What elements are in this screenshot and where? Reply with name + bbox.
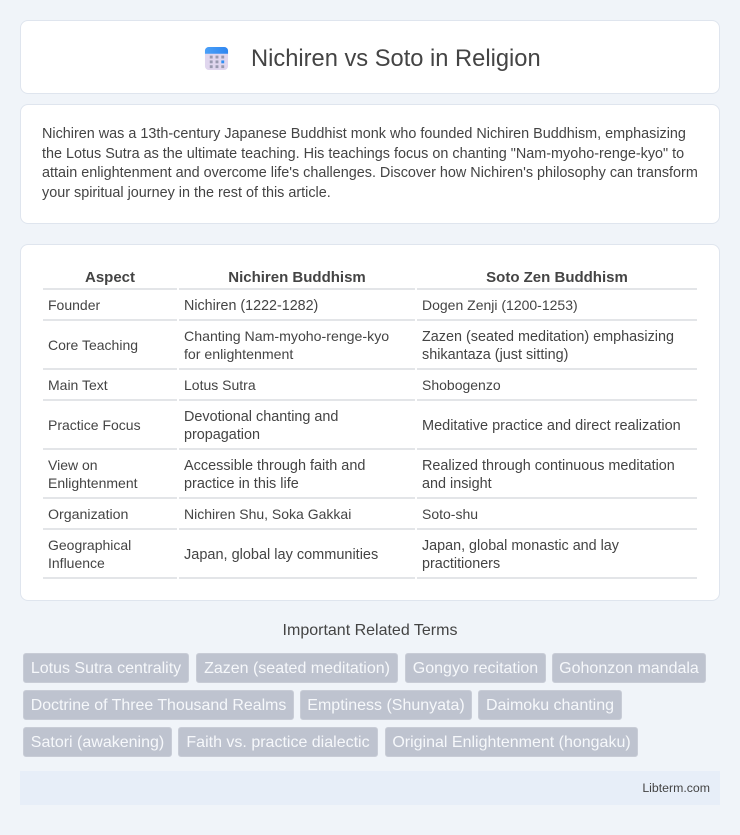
related terms tags: Zazen (seated meditation) — [204, 660, 390, 677]
comparison table: Devotional chanting and — [184, 409, 338, 425]
related terms tags: Emptiness (Shunyata) — [307, 697, 465, 714]
comparison table: propagation — [184, 427, 260, 443]
related terms tags: Faith vs. practice dialectic — [186, 734, 370, 751]
comparison table: Realized through continuous meditation — [422, 458, 675, 474]
intro text — [42, 126, 698, 201]
comparison table: Main Text — [48, 377, 108, 393]
header card — [20, 20, 720, 94]
icon: calendar — [204, 47, 228, 70]
comparison table: Geographical — [48, 537, 131, 553]
comparison table: Shobogenzo — [422, 377, 501, 393]
related terms tags: Doctrine of Three Thousand Realms — [31, 697, 286, 714]
comparison table: Japan, global monastic and lay — [422, 538, 619, 554]
intro text: the Lotus Sutra as the ultimate teaching. His teachings focus on chanting "Nam-myoho-renge-kyo" to — [42, 146, 684, 162]
intro text: attain enlightenment and overcome life's challenges. Discover how Nichiren's philosophy can transform — [42, 165, 698, 181]
comparison table: Organization — [48, 507, 128, 523]
comparison table: Nichiren (1222-1282) — [184, 298, 318, 314]
comparison table: Chanting Nam-myoho-renge-kyo — [184, 328, 389, 344]
table panel — [20, 244, 720, 601]
comparison table: Aspect — [85, 269, 135, 286]
comparison table: Soto Zen Buddhism — [486, 269, 628, 286]
comparison table: practice in this life — [184, 476, 299, 492]
comparison table: Dogen Zenji (1200-1253) — [422, 297, 578, 313]
related terms tags — [23, 653, 706, 757]
comparison table: Nichiren Shu, Soka Gakkai — [184, 506, 351, 522]
footer bar — [20, 771, 720, 805]
comparison table: Enlightenment — [48, 475, 138, 491]
comparison table: Meditative practice and direct realization — [422, 418, 681, 434]
related terms tags: Original Enlightenment (hongaku) — [392, 734, 631, 751]
intro text: your spiritual journey in the rest of this article. — [42, 185, 331, 201]
related terms heading: Important Related Terms — [283, 622, 457, 639]
comparison table: Practice Focus — [48, 417, 141, 433]
comparison table: View on — [48, 457, 98, 473]
related terms tags: Daimoku chanting — [486, 697, 614, 714]
comparison table: Influence — [48, 555, 105, 571]
footer credit: Libterm.com — [642, 781, 710, 795]
comparison table: Zazen (seated meditation) emphasizing — [422, 329, 674, 345]
intro text: Nichiren was a 13th-century Japanese Buddhist monk who founded Nichiren Buddhism, emphasizing — [42, 126, 686, 142]
comparison table: Soto-shu — [422, 506, 478, 522]
comparison table: Japan, global lay communities — [184, 547, 378, 563]
intro panel — [20, 104, 720, 224]
title: Nichiren vs Soto in Religion — [251, 46, 541, 72]
comparison table: Core Teaching — [48, 337, 138, 353]
comparison table: for enlightenment — [184, 346, 293, 362]
related terms tags: Gohonzon mandala — [559, 660, 699, 677]
comparison table: Founder — [48, 297, 100, 313]
comparison table: practitioners — [422, 556, 500, 572]
comparison table: Nichiren Buddhism — [228, 269, 366, 286]
comparison table: Accessible through faith and — [184, 458, 365, 474]
comparison table: Lotus Sutra — [184, 377, 256, 393]
related terms tags: Satori (awakening) — [31, 734, 164, 751]
comparison table: and insight — [422, 476, 492, 492]
related terms tags: Gongyo recitation — [413, 660, 538, 677]
comparison table — [43, 269, 697, 579]
comparison table: shikantaza (just sitting) — [422, 347, 568, 363]
related terms tags: Lotus Sutra centrality — [31, 660, 181, 677]
